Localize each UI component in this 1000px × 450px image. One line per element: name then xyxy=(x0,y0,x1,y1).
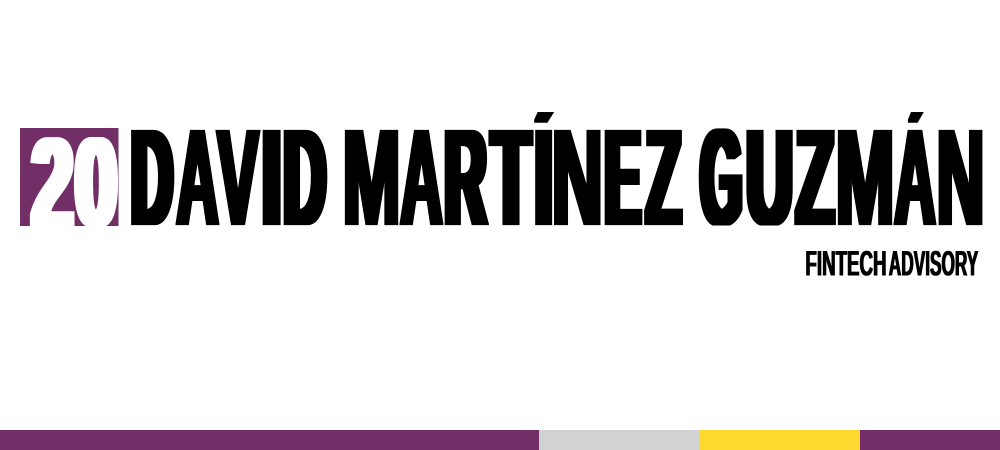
rank badge: 20: 2 xyxy=(32,112,73,253)
name heading: T xyxy=(492,102,530,255)
name heading: N xyxy=(552,102,603,255)
footer colour bar xyxy=(0,430,1000,450)
name heading: D xyxy=(284,102,326,255)
name heading: A xyxy=(176,102,218,255)
name heading: Á xyxy=(894,102,936,255)
name heading: D xyxy=(131,102,173,255)
name heading: A xyxy=(400,102,442,255)
name heading: E xyxy=(605,102,640,255)
name heading: I xyxy=(262,102,281,255)
name heading: Z xyxy=(796,102,834,255)
name heading: Í xyxy=(535,102,554,255)
name heading: Z xyxy=(646,102,681,255)
name heading xyxy=(131,112,982,226)
name heading: M xyxy=(836,102,894,255)
name heading: R xyxy=(445,102,486,255)
company name: FINTECH xyxy=(805,244,887,284)
name heading: M xyxy=(343,102,400,255)
name heading: U xyxy=(747,102,793,255)
name heading: V xyxy=(218,102,258,255)
rank badge: 20 xyxy=(20,128,118,226)
infographic canvas xyxy=(0,112,1000,450)
name heading: G xyxy=(701,102,742,255)
rank badge: 20: 0 xyxy=(75,112,117,253)
